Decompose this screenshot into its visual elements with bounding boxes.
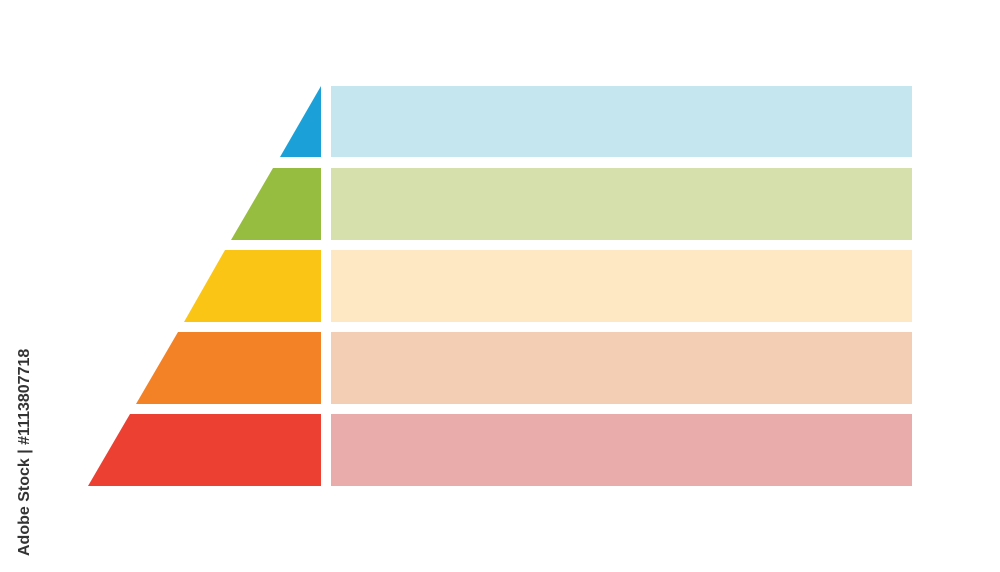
panel 2: light green bbox=[331, 168, 912, 240]
panel 1: light blue bbox=[331, 86, 912, 157]
panel 3: light yellow bbox=[331, 250, 912, 322]
pyramid tier 4: orange bbox=[136, 332, 321, 404]
watermark text: Adobe Stock | #1113807718 bbox=[16, 349, 33, 556]
panel 4: light orange bbox=[331, 332, 912, 404]
pyramid tier 3: yellow bbox=[184, 250, 321, 322]
panel 5: light red bbox=[331, 414, 912, 486]
pyramid tier 1: blue bbox=[280, 86, 321, 157]
pyramid tier 2: green bbox=[231, 168, 321, 240]
pyramid tier 5: red bbox=[88, 414, 321, 486]
